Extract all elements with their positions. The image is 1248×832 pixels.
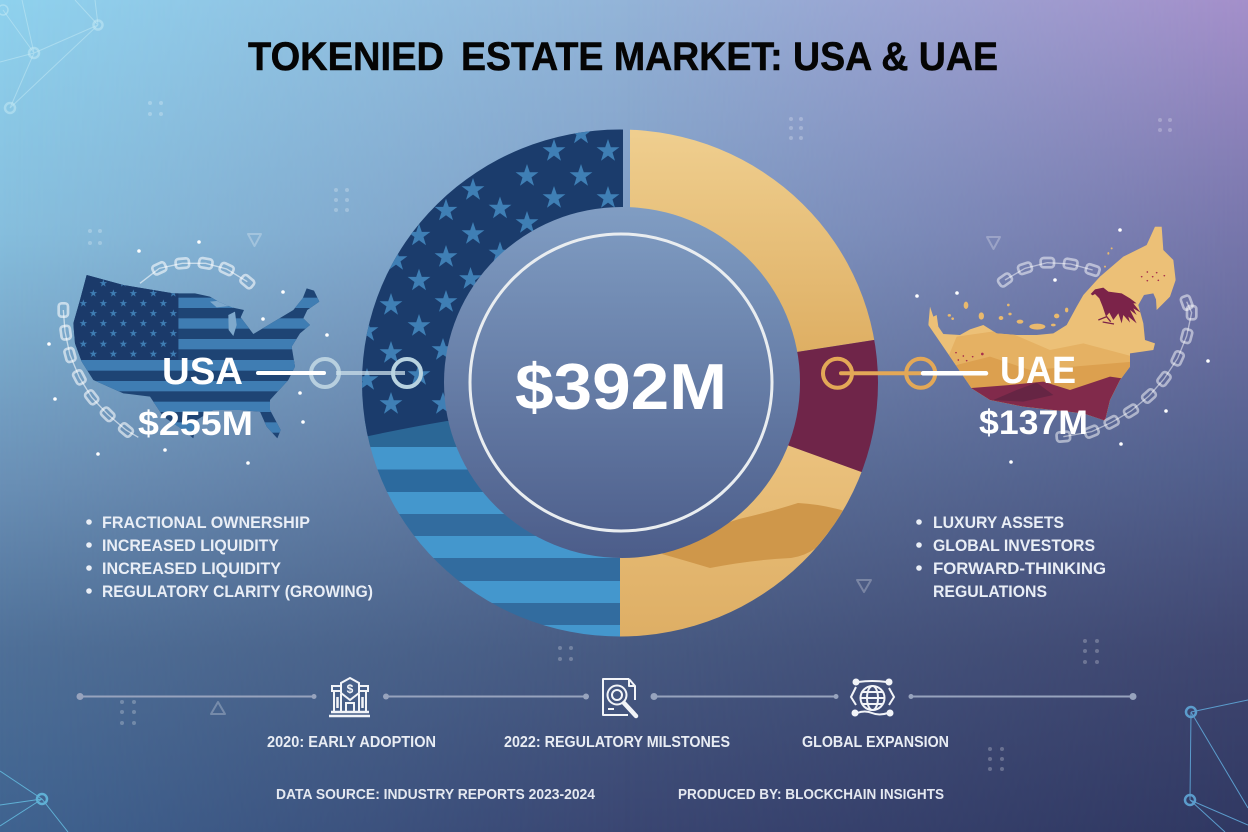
connector: UAE [823, 359, 986, 388]
total value: $392M [515, 350, 727, 423]
USA map [59, 258, 323, 440]
icon: bank: $ [347, 682, 354, 696]
text block: UAE benefits: GLOBAL INVESTORS [933, 536, 1095, 555]
label: USA: USA [162, 351, 243, 393]
label: UAE: UAE [1000, 350, 1076, 392]
timeline labels: GLOBAL EXPANSION [802, 734, 949, 751]
segment: UAE gold [620, 130, 874, 636]
timeline labels: 2020: EARLY ADOPTION [267, 734, 436, 751]
text block: UAE benefits: LUXURY ASSETS [933, 513, 1064, 532]
title: ESTATE MARKET: USA & UAE [461, 35, 998, 79]
timeline labels [267, 734, 949, 751]
UAE map [923, 223, 1196, 442]
icon: document with magnifier [603, 679, 636, 716]
connector: USA [258, 359, 421, 387]
decoration: dot clusters [88, 101, 1172, 771]
title: TOKENIED [248, 35, 444, 79]
text block: UAE benefits: REGULATIONS [933, 582, 1047, 601]
UAE map fill [928, 226, 1176, 420]
donut chart [362, 130, 878, 636]
chain: USA [59, 258, 255, 438]
text block: UAE benefits [916, 513, 1106, 601]
icon: bank [329, 678, 370, 716]
title [248, 35, 998, 79]
footer: PRODUCED BY: BLOCKCHAIN INSIGHTS [678, 786, 944, 803]
eagle emblem [1091, 288, 1141, 324]
text block: USA benefits: INCREASED LIQUIDITY [102, 536, 280, 555]
USA map fill [70, 273, 323, 440]
label: UAE [979, 350, 1088, 442]
footer [276, 786, 944, 803]
text block: UAE benefits: FORWARD-THINKING [933, 559, 1106, 578]
segment: UAE maroon [788, 340, 878, 472]
timeline labels: 2022: REGULATORY MILSTONES [504, 734, 730, 751]
decoration: white sparkle dots [47, 228, 1210, 465]
footer: DATA SOURCE: INDUSTRY REPORTS 2023-2024 [276, 786, 596, 803]
text block: USA benefits: REGULATORY CLARITY (GROWING) [102, 582, 373, 601]
UAE islands [948, 247, 1113, 330]
icon: globe network [851, 678, 894, 716]
text block: USA benefits [86, 513, 373, 601]
center disc [444, 207, 800, 558]
segment: USA $255M flag [350, 120, 623, 650]
text block: USA benefits: FRACTIONAL OWNERSHIP [102, 513, 310, 532]
label: USA [138, 351, 253, 443]
timeline line [76, 693, 1136, 700]
label: USA: $255M [138, 405, 253, 443]
chain: UAE [997, 258, 1196, 442]
center ring [470, 234, 772, 531]
text block: USA benefits: INCREASED LIQUIDITY [102, 559, 282, 578]
decoration: small triangles [211, 234, 1000, 714]
label: UAE: $137M [979, 404, 1088, 442]
